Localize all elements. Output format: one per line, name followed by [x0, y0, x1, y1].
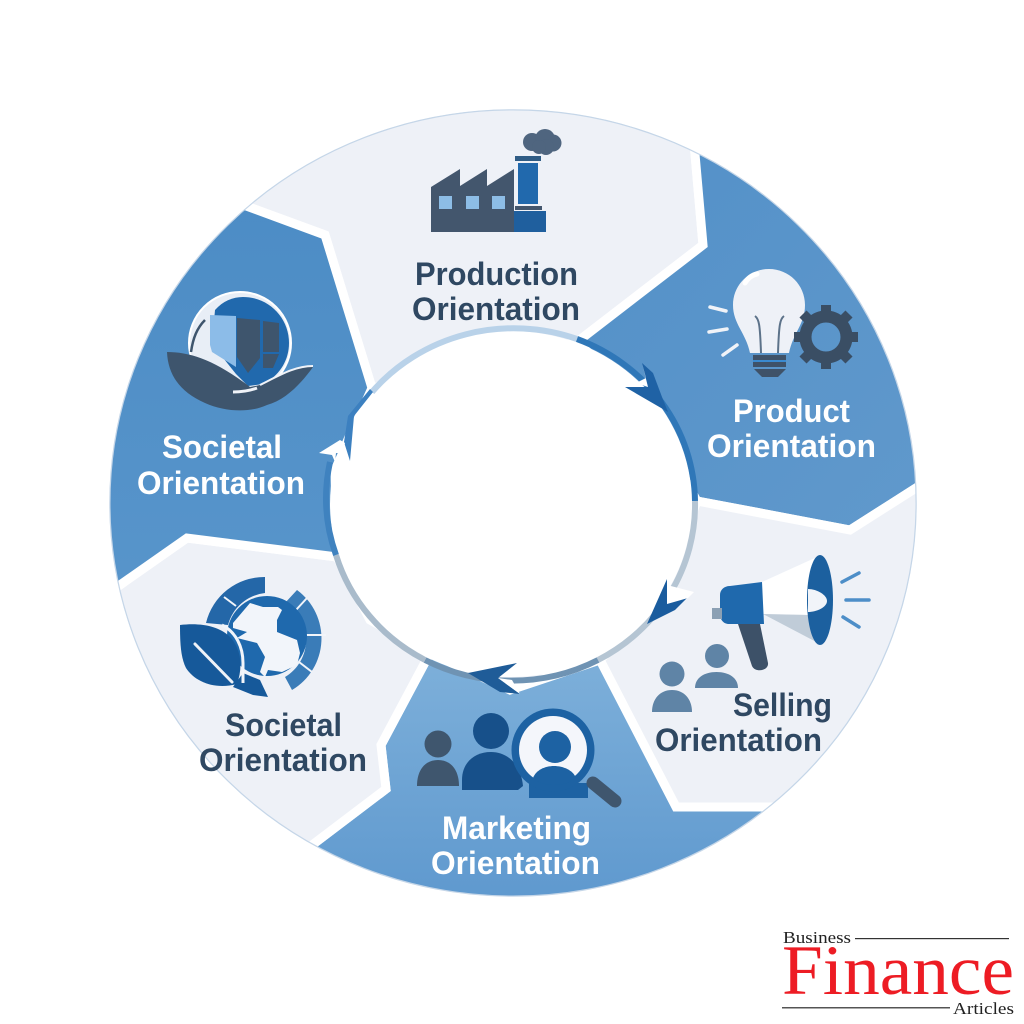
logo: Business Finance Articles: Finance: [782, 932, 1014, 1010]
arrow: to marketing: [468, 663, 520, 694]
outer edge: [110, 110, 916, 896]
label: lower societal: Orientation: [199, 742, 367, 778]
segment: production: [252, 110, 690, 384]
label: selling: [655, 687, 832, 758]
label: selling: Selling: [733, 687, 832, 723]
icon: earth and leaf: [180, 577, 326, 697]
label: lower societal: [199, 707, 367, 778]
segment: lower societal: [120, 562, 429, 846]
arrow: to societal: [319, 389, 373, 462]
arrow: to product: [625, 363, 668, 412]
label: upper societal: Orientation: [137, 465, 305, 501]
segment: upper societal: [110, 210, 368, 580]
label: production: Production: [415, 256, 578, 292]
outer edge highlight: [110, 110, 916, 896]
label: selling: Orientation: [655, 722, 822, 758]
icon: megaphone: [712, 555, 869, 670]
icon: audience: [652, 644, 738, 712]
segment: selling: [598, 483, 916, 802]
label: product: Product: [733, 393, 850, 429]
segment: product: [582, 155, 915, 526]
centre circle with cycle ring: [326, 328, 695, 681]
segment: marketing: [318, 656, 762, 896]
infographic: marketing orientation cycle: [109, 109, 1014, 1014]
label: production: [412, 256, 580, 327]
label: marketing: Orientation: [431, 845, 600, 881]
icon: globe in hand: [167, 292, 313, 410]
label: product: [707, 393, 876, 464]
icon: customers and magnifier: [417, 708, 615, 801]
logo: Business Finance Articles: Articles: [953, 999, 1014, 1018]
label: marketing: [431, 810, 600, 881]
icon: factory: [431, 129, 562, 232]
label: upper societal: Societal: [162, 429, 282, 465]
label: production: Orientation: [412, 291, 580, 327]
label: lower societal: Societal: [225, 707, 342, 743]
arrow: to selling: [647, 579, 694, 624]
label: upper societal: [137, 429, 305, 501]
ring of six segments: [110, 110, 916, 896]
logo: Business Finance Articles: Business: [783, 928, 851, 947]
label: marketing: Marketing: [442, 810, 591, 846]
label: product: Orientation: [707, 428, 876, 464]
icon: light bulb and gear: [709, 269, 858, 377]
